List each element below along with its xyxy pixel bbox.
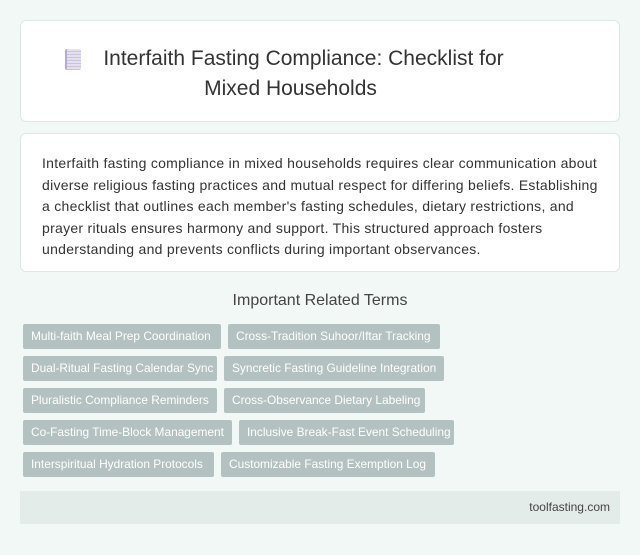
tag (23, 420, 232, 445)
tag (23, 388, 217, 413)
tag: Dual-Ritual Fasting Calendar Sync (31, 361, 213, 375)
title: Interfaith Fasting Compliance: Checklist for Mixed Households (103, 47, 504, 100)
tag: Pluralistic Compliance Reminders (31, 393, 209, 407)
tag: Syncretic Fasting Guideline Integration (232, 361, 436, 375)
footer text: toolfasting.com (529, 500, 610, 514)
section heading: Important Related Terms (233, 292, 407, 309)
tag: Co-Fasting Time-Block Management (31, 425, 224, 439)
tag (23, 324, 221, 349)
summary card (20, 133, 620, 272)
footer (20, 491, 620, 524)
tag: Multi-faith Meal Prep Coordination (31, 329, 211, 343)
tag (239, 420, 454, 445)
tag: Interspiritual Hydration Protocols (31, 457, 203, 471)
tag: Cross-Tradition Suhoor/Iftar Tracking (236, 329, 431, 343)
tag: Customizable Fasting Exemption Log (229, 457, 426, 471)
icon: document (65, 49, 81, 70)
tag (23, 452, 214, 477)
header card (20, 20, 620, 122)
tag: Cross-Observance Dietary Labeling (232, 393, 420, 407)
tag (221, 452, 435, 477)
tag (224, 356, 444, 381)
tag (23, 356, 217, 381)
tag (228, 324, 440, 349)
tag (224, 388, 425, 413)
summary text: Interfaith fasting compliance in mixed households requires clear communication about diverse religious fasting practices and mutual respect for differing beliefs. Establishing a checklist that outlines each member's fasting schedules, dietary restrictions, and prayer rituals ensures harmony and support. This structured approach fosters understanding and prevents conflicts during important observances. (42, 155, 598, 257)
tag: Inclusive Break-Fast Event Scheduling (247, 425, 451, 439)
